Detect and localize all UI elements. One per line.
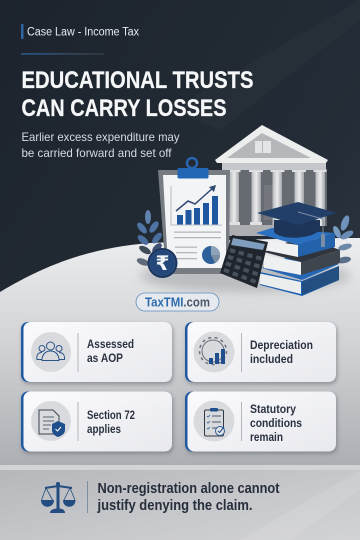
- icon: open book on pediment: [255, 141, 271, 153]
- icon: rupee coin: [148, 248, 178, 278]
- icon: document with shield: [39, 410, 65, 437]
- icon: right leaves: [332, 214, 355, 264]
- card: statutory conditions remain: conditions: [250, 416, 302, 430]
- icon: group of people: [37, 342, 65, 360]
- subtitle: Earlier excess expenditure may: [22, 130, 180, 144]
- section tag: Case Law - Income Tax: [27, 26, 139, 38]
- callout text: Non-registration alone cannot: [98, 481, 280, 497]
- subtitle: [22, 130, 180, 160]
- light curved panel: [0, 238, 360, 470]
- title: [22, 67, 254, 122]
- card: section 72 applies: [21, 392, 173, 454]
- subtitle: be carried forward and set off: [22, 146, 172, 160]
- icon: gear with bars: [200, 338, 226, 364]
- TaxTMI badge: [136, 293, 219, 311]
- icon: graduation cap: [257, 202, 337, 247]
- title: EDUCATIONAL TRUSTS: [22, 67, 254, 94]
- card: depreciation included: [185, 322, 337, 384]
- icon: checklist clipboard: [204, 408, 224, 436]
- title: CAN CARRY LOSSES: [22, 95, 226, 122]
- illustration: education and finance: [135, 125, 355, 296]
- icon: calculator: [220, 235, 268, 288]
- icon: rupee coin: ₹: [156, 251, 169, 275]
- icon: stacked books: [256, 228, 340, 296]
- icon: clipboard with chart: [158, 158, 230, 274]
- callout text: justify denying the claim.: [97, 498, 252, 514]
- icon: pie chart: [202, 246, 220, 264]
- TaxTMI badge: TaxTMI.com: [145, 295, 210, 309]
- card: statutory conditions remain: Statutory: [250, 402, 296, 416]
- card: statutory conditions remain: remain: [250, 430, 283, 444]
- card: section 72 applies: applies: [87, 422, 121, 436]
- bottom banner: [0, 465, 360, 540]
- card: depreciation included: included: [250, 352, 293, 366]
- icon: left leaves: [135, 210, 164, 267]
- card: section 72 applies: Section 72: [87, 408, 135, 422]
- card: assessed as AOP: [21, 322, 173, 384]
- icon: scales of justice: [41, 482, 76, 513]
- card: assessed as AOP: Assessed: [87, 337, 134, 351]
- icon: bank building: [215, 125, 328, 236]
- card: statutory conditions remain: [185, 392, 337, 454]
- card: assessed as AOP: as AOP: [87, 351, 123, 365]
- card: depreciation included: Depreciation: [250, 338, 313, 352]
